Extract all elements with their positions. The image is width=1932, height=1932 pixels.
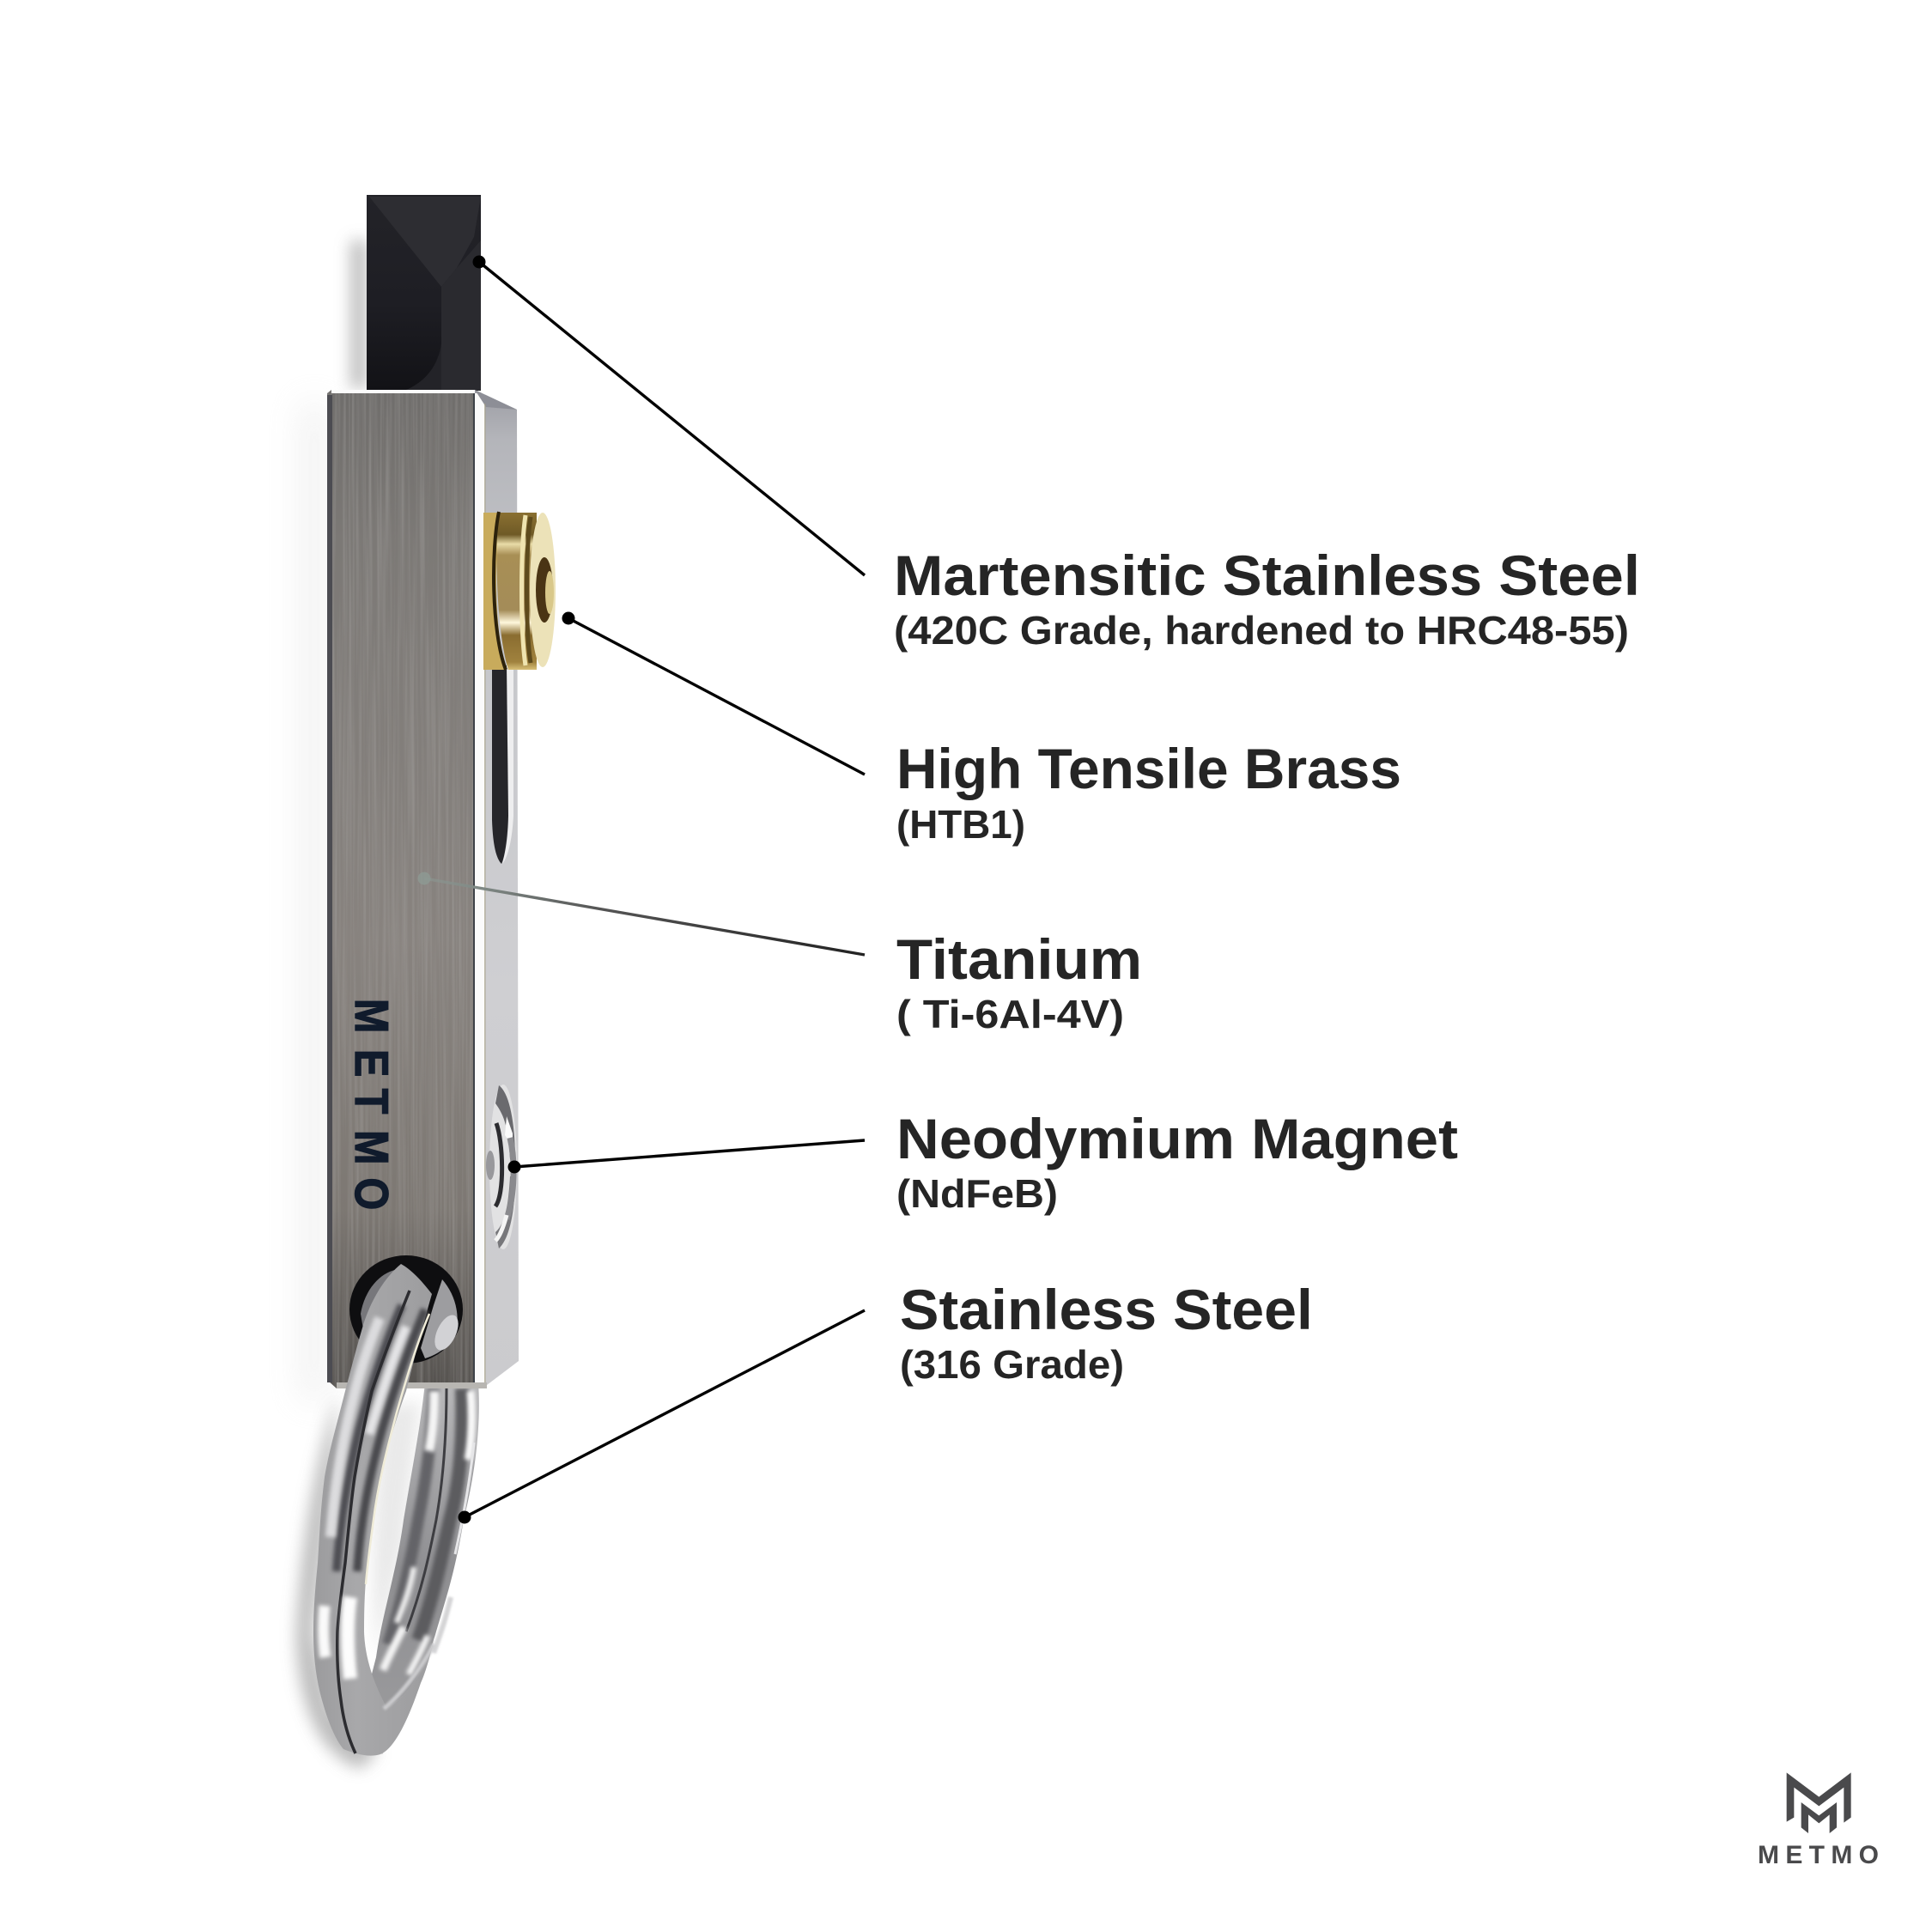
label: high tensile brass [896,737,1401,847]
label: high tensile brass: High Tensile Brass [896,737,1401,800]
neodymium magnet [486,1084,517,1249]
callout: magnet pointer [508,1140,865,1173]
label: stainless steel: (316 Grade) [900,1342,1124,1387]
soft wall shadow [296,240,421,1769]
label: stainless steel: Stainless Steel [900,1278,1313,1341]
ring hole [349,1255,463,1364]
callout lines and dots [417,256,865,1523]
label: titanium: Titanium [896,927,1142,991]
callout: stainless ring pointer [459,1310,865,1523]
label: high tensile brass: (HTB1) [896,802,1025,847]
METMO logo [1758,1772,1879,1869]
blade tip: martensitic steel bit [367,195,481,391]
brass screw [483,512,556,670]
logo wordmark: METMO [1758,1841,1879,1869]
back of key ring [361,1382,479,1754]
callout: titanium pointer [417,872,865,955]
side plate polished stainless [475,390,519,1387]
brand mark on titanium: METMO [345,999,398,1210]
product: keychain tool photo [296,195,556,1769]
label: neodymium magnet [896,1107,1458,1216]
label: martensitic stainless steel: Martensitic Stainless Steel [894,544,1640,607]
label: martensitic stainless steel [894,544,1640,653]
label: martensitic stainless steel: (420C Grade, hardened to HRC48-55) [894,608,1629,653]
label: neodymium magnet: (NdFeB) [896,1171,1058,1216]
label: neodymium magnet: Neodymium Magnet [896,1107,1458,1170]
logo mark [1787,1772,1851,1833]
label: stainless steel [900,1278,1313,1387]
slot in side plate [492,665,513,864]
label: titanium: ( Ti-6Al-4V) [896,992,1124,1036]
titanium front body [327,390,487,1388]
label: titanium [896,927,1142,1036]
front of key ring [313,1264,436,1756]
callout: brass pointer [562,611,865,775]
callout: martensitic steel pointer [472,256,865,575]
